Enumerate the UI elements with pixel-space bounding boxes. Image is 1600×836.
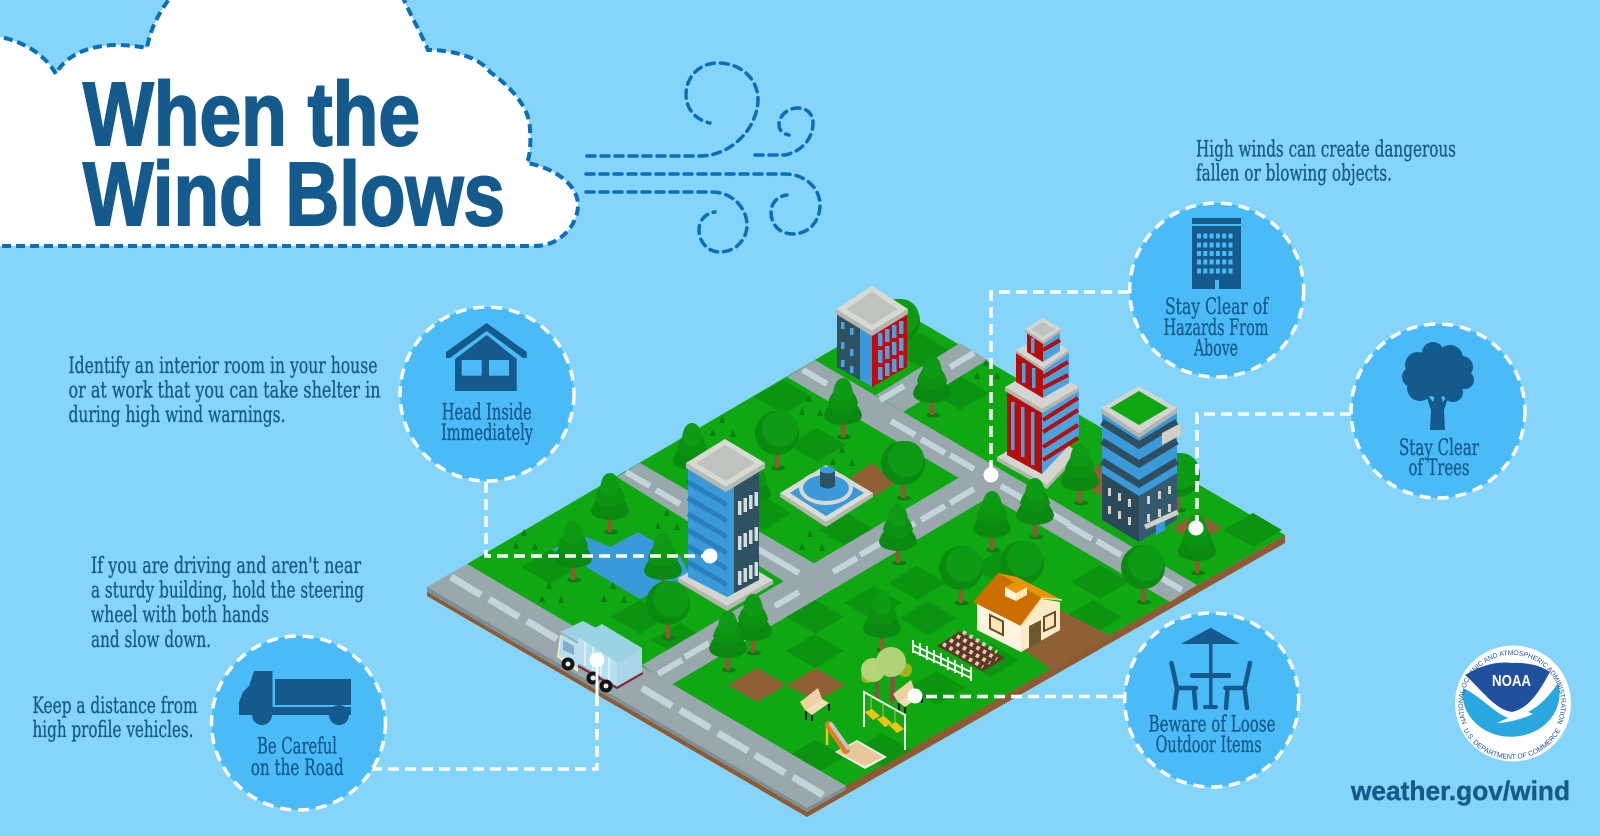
callout: trees bbox=[1351, 324, 1525, 498]
grass tufts bbox=[513, 359, 1000, 603]
pine tree bbox=[734, 594, 772, 656]
icon: office building bbox=[1192, 218, 1241, 289]
callout: be careful on the road bbox=[212, 636, 386, 810]
label: Outdoor Items bbox=[1156, 732, 1262, 758]
road lane markings bbox=[451, 353, 1182, 795]
cloud bbox=[0, 0, 578, 246]
icon: tree bbox=[1402, 342, 1474, 430]
text block: shelter bbox=[68, 353, 380, 428]
pine tree bbox=[879, 504, 917, 566]
title: Wind Blows bbox=[83, 145, 505, 245]
label: Stay Clear of bbox=[1165, 294, 1269, 320]
text block: blowing objects: fallen or blowing objects. bbox=[1196, 161, 1392, 187]
connector: road bbox=[371, 652, 604, 769]
round tree bbox=[1000, 541, 1044, 600]
callout: outdoor items bbox=[1125, 613, 1299, 787]
checker grass patches bbox=[521, 333, 1282, 774]
text block: blowing objects: High winds can create dangerous bbox=[1196, 137, 1456, 163]
text block: blowing objects bbox=[1196, 137, 1456, 187]
logo: NOAA: U.S. DEPARTMENT OF COMMERCE bbox=[1464, 728, 1560, 760]
label: on the Road bbox=[251, 755, 344, 781]
text block: shelter: during high wind warnings. bbox=[68, 402, 286, 428]
building: green roof office bbox=[1101, 386, 1181, 542]
label: of Trees bbox=[1408, 455, 1470, 481]
label: Stay Clear bbox=[1399, 435, 1479, 461]
label: Head Inside bbox=[442, 399, 532, 425]
round tree bbox=[1121, 545, 1165, 604]
callout: head inside bbox=[400, 307, 574, 481]
pine tree bbox=[973, 491, 1011, 552]
pine tree bbox=[554, 521, 592, 582]
tree behind top building bbox=[876, 299, 920, 358]
label: Hazards From bbox=[1164, 315, 1268, 341]
text block: driving bbox=[91, 553, 364, 653]
web address: weather.gov/wind bbox=[1350, 776, 1570, 806]
icon: patio table bbox=[1172, 628, 1250, 709]
icon: wind swirls bbox=[586, 63, 820, 252]
label: Immediately bbox=[441, 420, 533, 446]
slide and sandbox bbox=[827, 724, 887, 769]
pine tree bbox=[709, 611, 747, 672]
bench bbox=[893, 680, 922, 713]
text block: high profile vehicles bbox=[32, 693, 198, 743]
text block: driving: a sturdy building, hold the steering bbox=[91, 577, 364, 603]
building: top navy and red bbox=[836, 286, 908, 387]
label: Be Careful bbox=[257, 734, 337, 760]
round tree bbox=[881, 441, 925, 500]
title: When the bbox=[83, 65, 420, 165]
text block: driving: wheel with both hands bbox=[91, 602, 269, 628]
ground slab bbox=[427, 310, 1285, 817]
bench bbox=[800, 688, 829, 721]
light green park trees bbox=[861, 647, 912, 702]
logo: NOAA: NOAA bbox=[1492, 673, 1531, 690]
pine tree bbox=[1178, 514, 1216, 576]
text block: shelter: Identify an interior room in your house bbox=[68, 353, 378, 379]
isometric city map bbox=[427, 286, 1285, 817]
fountain bbox=[780, 465, 873, 527]
roads bbox=[427, 343, 1197, 808]
round tree bbox=[939, 546, 983, 606]
label bbox=[251, 734, 344, 781]
pine tree bbox=[1061, 444, 1099, 506]
text block: high profile vehicles: high profile vehicles. bbox=[32, 717, 194, 743]
dirt patches bbox=[728, 463, 1222, 702]
round tree bbox=[755, 411, 799, 470]
logo: NOAA bbox=[1455, 646, 1571, 762]
connector: hazards from above bbox=[984, 292, 1129, 482]
connector: outdoor items bbox=[908, 688, 1124, 704]
text block: driving: If you are driving and aren't near bbox=[91, 553, 361, 579]
connector: trees bbox=[1188, 414, 1351, 536]
text block: driving: and slow down. bbox=[91, 627, 211, 653]
pine tree bbox=[591, 473, 629, 534]
pine tree behind blue tower bbox=[733, 456, 771, 518]
label: Above bbox=[1193, 336, 1238, 362]
text block: shelter: or at work that you can take shelter in bbox=[68, 377, 380, 403]
house bbox=[973, 573, 1062, 652]
icon: truck bbox=[239, 671, 351, 725]
white fence bbox=[913, 640, 971, 681]
connector: head inside bbox=[486, 482, 718, 564]
icon: house bbox=[446, 323, 527, 391]
swing set bbox=[864, 692, 905, 750]
text block: high profile vehicles: Keep a distance from bbox=[32, 693, 198, 719]
callout: hazards from above bbox=[1130, 203, 1304, 377]
building: stepped red tower bbox=[997, 318, 1079, 489]
pine tree behind blue tower bbox=[673, 423, 711, 484]
pine tree bbox=[644, 533, 682, 594]
label bbox=[1399, 435, 1479, 481]
pine tree bbox=[863, 591, 901, 652]
box truck bbox=[557, 621, 643, 692]
label bbox=[441, 399, 533, 446]
label bbox=[1148, 712, 1276, 758]
pond bbox=[552, 532, 690, 599]
pine tree bbox=[913, 356, 951, 418]
flower bed bbox=[937, 631, 1005, 671]
pine tree bbox=[824, 378, 862, 440]
label: Beware of Loose bbox=[1148, 712, 1276, 738]
building: blue tower bbox=[678, 439, 773, 611]
label bbox=[1164, 294, 1269, 362]
pine tree bbox=[1016, 478, 1054, 540]
round tree bbox=[1156, 453, 1200, 512]
logo: NOAA: NATIONAL OCEANIC AND ATMOSPHERIC ADMINISTRATION bbox=[1458, 650, 1566, 724]
round tree bbox=[646, 581, 690, 640]
title bbox=[83, 65, 505, 245]
